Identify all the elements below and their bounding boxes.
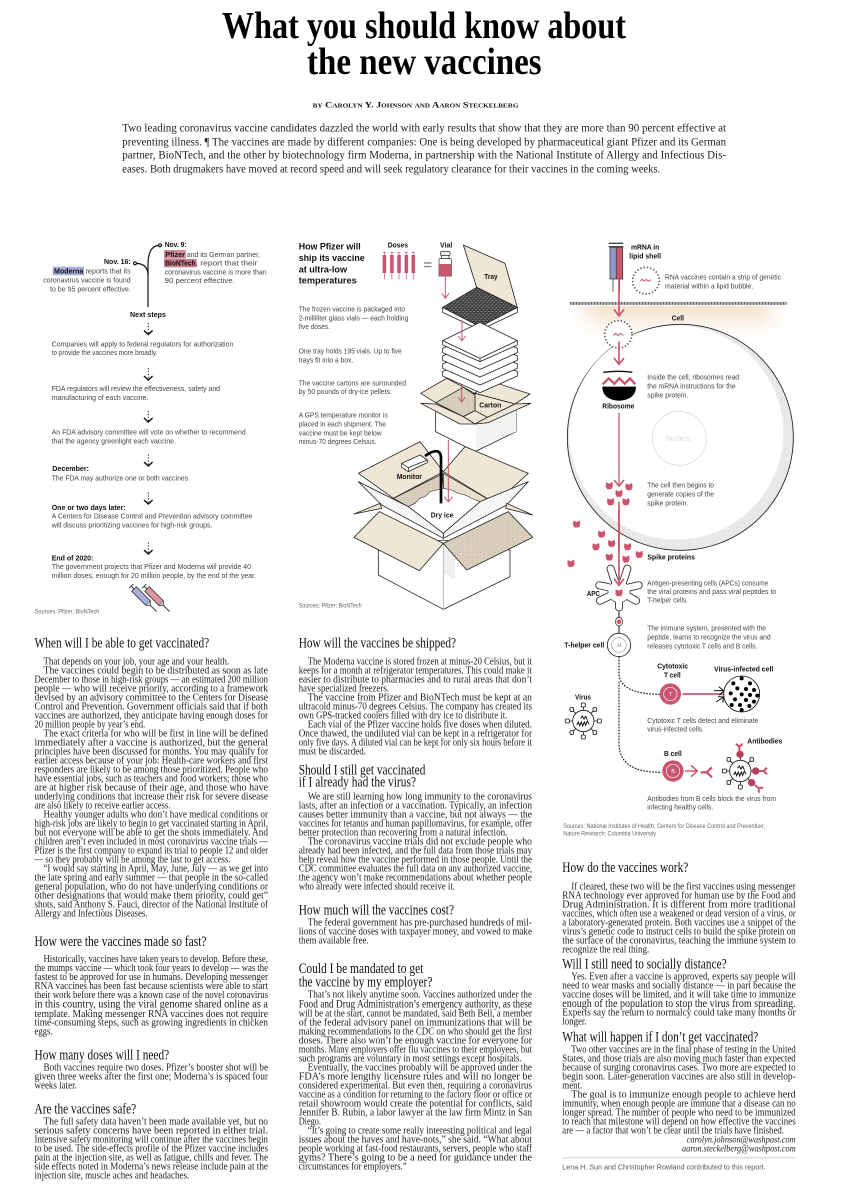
- virus-infected cell: [714, 676, 760, 712]
- tray and tray stack: [442, 245, 517, 393]
- text block: principles have been discussed for months. You may qualify for: [34, 747, 269, 758]
- text block: That’s not likely anytime soon. Vaccines authorized under the: [308, 990, 532, 1001]
- heading: [299, 762, 426, 791]
- heading: [299, 961, 432, 991]
- intro paragraph: Two leading coronavirus vaccine candidates dazzled the world with early results that show that they are more than 90 percent effective at: [122, 121, 727, 135]
- article column 3: [562, 860, 796, 1171]
- text block: are — a factor that won’t be clear until the trials have finished.: [562, 1126, 784, 1137]
- APC cell: [599, 510, 639, 607]
- step texts: The government projects that Pfizer and Moderna will provide 40: [52, 562, 251, 571]
- text block: That depends on your job, your age and your health.: [44, 657, 229, 668]
- text block: a laboratory-generated protein. Both vaccines use a snippet of the: [562, 918, 796, 929]
- text block: Diego.: [299, 1117, 321, 1128]
- text block: Yes. Even after a vaccine is approved, experts say people will: [571, 972, 796, 983]
- intro paragraph: [122, 121, 727, 176]
- art labels: Monitor: [397, 472, 422, 481]
- cell texts: Cell: [672, 314, 684, 323]
- text block: serious safety concerns have been reported in either trial.: [34, 1126, 268, 1137]
- shipping step texts: The vaccine cartons are surrounded: [299, 378, 406, 387]
- text block: The federal government has pre-purchased hundreds of mil-: [308, 918, 533, 929]
- text block: pain at the injection site, as well as fatigue, chills and fever. The: [34, 1153, 268, 1164]
- text block: The full safety data haven’t been made available yet, but no: [44, 1117, 268, 1128]
- immune texts: the viral proteins and pass viral peptides to: [647, 587, 776, 596]
- text block: Each vial of the Pfizer vaccine holds five doses when diluted.: [308, 720, 532, 731]
- contributor note: Lena H. Sun and Christopher Rowland contributed to this report.: [562, 1162, 766, 1171]
- text block: The Moderna vaccine is stored frozen at minus-20 Celsius, but it: [308, 657, 532, 668]
- text block: 20 million people by year’s end.: [34, 720, 145, 731]
- text block: Both vaccines require two doses. Pfizer’s booster shot will be: [44, 1063, 268, 1074]
- title: the new vaccines: [307, 41, 542, 83]
- text block: the late spring and early summer — that people in the so-called: [34, 873, 268, 884]
- immune texts: The immune system, presented with the: [647, 624, 766, 633]
- title: What you should know about: [222, 5, 626, 47]
- Nov. 9 note: 90 percent effective.: [165, 276, 235, 285]
- text block: recognize the real thing.: [562, 945, 649, 956]
- panel heading: at ultra-low: [299, 264, 348, 275]
- immune texts: T-helper cells.: [647, 595, 688, 604]
- immune texts: [564, 552, 782, 812]
- text block: people — who will receive priority, according to a framework: [34, 684, 269, 695]
- arrow: tray to stack: [458, 320, 466, 341]
- shipping step texts: 2-milliliter glass vials — each holding: [299, 313, 408, 322]
- text block: to be used. The side-effects profile of the Pfizer vaccine includes: [34, 1144, 268, 1155]
- text block: “It’s going to create some really interesting political and legal: [308, 1126, 532, 1137]
- text block: Control and Prevention. Government officials said that if both: [34, 702, 268, 713]
- step texts: December:: [52, 464, 89, 473]
- step texts: The FDA may authorize one or both vaccines.: [52, 473, 190, 482]
- text block: their work before there was a known case of the novel coronavirus: [34, 990, 268, 1001]
- immune texts: Spike proteins: [647, 552, 695, 561]
- immune texts: Antibodies from B cells block the virus from: [647, 794, 776, 803]
- text block: lasts, after an infection or a vaccination. Typically, an infection: [299, 801, 532, 812]
- text block: We are still learning how long immunity to the coronavirus: [308, 792, 532, 803]
- cytotoxic T cell: [660, 683, 681, 705]
- Nov. 16 note: Moderna: [54, 267, 84, 276]
- text block: them available free.: [299, 936, 369, 947]
- text block: December to those in high-risk groups — an estimated 200 million: [34, 675, 268, 686]
- text block: longer spread. The number of people who need to be immunized: [562, 1108, 796, 1119]
- sources: Sources: Pfizer; BioNTech: [35, 608, 100, 615]
- icon: five dose syringes: [383, 252, 415, 280]
- shipping step texts: One tray holds 195 vials. Up to five: [299, 347, 402, 356]
- heading: the vaccine by my employer?: [299, 975, 432, 991]
- cell texts: mRNA in: [631, 243, 660, 252]
- text block: immediately after a vaccine is authorized, but the general: [34, 738, 268, 749]
- text block: to reach that milestone will depend on how effective the vaccines: [562, 1117, 796, 1128]
- text block: The goal is to immunize enough people to achieve herd: [571, 1090, 796, 1101]
- text block: The vaccine from Pfizer and BioNTech must be kept at an: [308, 693, 532, 704]
- immune texts: Antibodies: [747, 736, 782, 745]
- arrow to spike proteins: [614, 413, 624, 550]
- Nov. 9 note: Pfizer: [165, 250, 185, 259]
- text block: Intensive safety monitoring will continue after the vaccines begin: [34, 1135, 268, 1146]
- cell texts: spike protein.: [647, 390, 688, 399]
- sources: Nature Research; Columbia University: [563, 830, 657, 837]
- step texts: will discuss prioritizing vaccines for high-risk groups.: [51, 521, 212, 530]
- text block: [34, 1063, 269, 1092]
- immune texts: Cytotoxic T cells detect and eliminate: [647, 716, 758, 725]
- text block: vaccines are authorized, they anticipate having enough doses for: [34, 711, 269, 722]
- immune texts: H: [617, 643, 621, 649]
- text block: people working at fast-food restaurants, servers, people who staff: [299, 1144, 533, 1155]
- text block: [34, 954, 269, 1038]
- icon: two syringes: [129, 584, 172, 614]
- heading: Could I be mandated to get: [299, 961, 423, 977]
- text block: causes better immunity than a vaccine, but not always — the: [299, 810, 532, 821]
- Nov. 16 note: [43, 257, 131, 293]
- text block: the agency won’t make recommendations about whether people: [299, 873, 532, 884]
- text block: already had been infected, and the full data from those trials may: [299, 846, 533, 857]
- text block: “I would say starting in April, May, June, July — as we get into: [44, 864, 268, 875]
- cell texts: RNA vaccines contain a strip of genetic: [665, 273, 781, 282]
- text block: Drug Administration. It is different from more traditional: [562, 900, 796, 911]
- carton box: [421, 378, 531, 452]
- text block: own GPS-tracked coolers filled with dry ice to distribute it.: [299, 711, 507, 722]
- Nov. 9 note: coronavirus vaccine is more than: [165, 267, 267, 276]
- text block: [562, 972, 796, 1028]
- step texts: million doses, enough for 20 million people, by the end of the year.: [52, 571, 256, 580]
- text block: considered experimental. But even then, requiring a coronavirus: [299, 1081, 532, 1092]
- text block: children aren’t even included in most coronavirus vaccine trials —: [34, 837, 269, 848]
- text block: lions of vaccine doses with taxpayer money, and vowed to make: [299, 927, 532, 938]
- panel heading: ship its vaccine: [299, 253, 365, 264]
- heading: How were the vaccines made so fast?: [34, 934, 206, 950]
- cell texts: material within a lipid bubble.: [665, 281, 753, 290]
- intro paragraph: partner, BioNTech, and the other by biotechnology firm Moderna, in partnership with the National Institute of Allergy and Infectious Dis-: [122, 148, 726, 162]
- text block: vaccine as a condition for returning to the factory floor or office or: [299, 1090, 533, 1101]
- tray base: [443, 287, 517, 330]
- text block: CDC committee evaluates the full data on any authorized vaccine,: [299, 864, 532, 875]
- shipping step texts: placed in each shipment. The: [299, 420, 386, 429]
- text block: injection site, muscle aches and headaches.: [34, 1171, 189, 1182]
- equals sign: [424, 263, 432, 267]
- text block: have specialized freezers.: [299, 684, 389, 695]
- step texts: One or two days later:: [52, 503, 126, 512]
- tray lid: [463, 245, 517, 307]
- arrow to ribosome: [614, 342, 624, 364]
- immune texts: infecting healthy cells.: [647, 803, 713, 812]
- sources: Sources: Pfizer; BioNTech: [299, 602, 362, 609]
- lipid bubble: [633, 267, 659, 294]
- Nov. 9 note: BioNTech: [165, 259, 196, 268]
- text block: The vaccines could begin to be distributed as soon as late: [44, 666, 268, 677]
- Nov. 16 note: Nov. 16:: [104, 257, 131, 266]
- text block: the surface of the coronavirus, teaching the immune system to: [562, 936, 796, 947]
- step texts: Companies will apply to federal regulators for authorization: [52, 339, 233, 348]
- intro paragraph: preventing illness. ¶ The vaccines are made by different companies: One is being developed by pharmaceutical giant Pfizer and its German: [122, 134, 726, 148]
- Nov. 9 note: [165, 240, 267, 285]
- article column 1: [34, 635, 269, 1182]
- text block: Eventually, the vaccines probably will be approved under the: [308, 1063, 532, 1074]
- text block: [34, 657, 269, 920]
- text block: begin soon. Later-generation vaccines are also still in develop-: [562, 1072, 796, 1083]
- text block: vaccines, which often use a weakened or dead version of a virus, or: [562, 909, 796, 920]
- step texts: [51, 339, 256, 580]
- doses and vial labels: Vial: [440, 241, 452, 250]
- text block: keeps for a month at refrigerator temperatures. This could make it: [299, 666, 532, 677]
- art labels: Dry ice: [431, 510, 453, 519]
- art labels: [397, 272, 502, 519]
- text block: only five days. A diluted vial can be kept for only six hours before it: [299, 738, 532, 749]
- panel: next steps timeline: [35, 240, 267, 615]
- text block: Two other vaccines are in the final phase of testing in the United: [571, 1045, 796, 1056]
- heading: How many doses will I need?: [34, 1047, 169, 1063]
- text block: [299, 990, 533, 1173]
- text block: fastest to be approved for use in humans. Developing messenger: [34, 972, 269, 983]
- sources: Sources: National Institutes of Health; Centers for Disease Control and Prevention;: [563, 823, 765, 830]
- shipping step texts: minus-70 degrees Celsius.: [299, 437, 377, 446]
- heading: What will happen if I don’t get vaccinated?: [562, 1029, 758, 1045]
- author emails: [682, 1136, 796, 1155]
- text block: weeks later.: [34, 1081, 77, 1092]
- text block: of the federal advisory panel on immunizations that will be: [299, 1018, 532, 1029]
- immune texts: APC: [587, 589, 601, 598]
- panel heading: [299, 242, 365, 287]
- text block: [562, 882, 796, 956]
- immune texts: peptide, learns to recognize the virus and: [647, 632, 771, 641]
- shipping step texts: five doses.: [299, 322, 330, 331]
- sources: [563, 823, 765, 837]
- immune texts: B: [671, 769, 675, 775]
- timeline branches: [134, 244, 162, 307]
- text block: Historically, vaccines have taken years to develop. Before these,: [44, 954, 268, 965]
- icon: vial: [439, 252, 452, 276]
- immune texts: Virus: [575, 693, 591, 702]
- Nov. 9 note: and its German partner,: [187, 250, 260, 259]
- cell texts: Ribosome: [602, 401, 634, 410]
- shipping step texts: A GPS temperature monitor is: [299, 411, 388, 420]
- doses and vial labels: Doses: [388, 241, 408, 250]
- text block: Experts say the return to normalcy could take many months or: [562, 1008, 796, 1019]
- author emails: aaron.steckelberg@washpost.com: [682, 1145, 796, 1155]
- immune texts: Virus-infected cell: [714, 664, 773, 673]
- heading: How do the vaccines work?: [562, 860, 688, 876]
- text block: Food and Drug Administration’s emergency authority, as these: [299, 999, 532, 1011]
- text block: months. Many employers offer flu vaccines to their employees, but: [299, 1045, 532, 1056]
- text block: high-risk jobs are likely to begin to get vaccinated starting in April,: [34, 819, 268, 830]
- text block: such programs are voluntary in most settings except hospitals.: [299, 1054, 522, 1065]
- text block: because of surging coronavirus cases. Two more are expected to: [562, 1063, 796, 1074]
- shipping step texts: trays fit into a box.: [299, 355, 353, 364]
- immune texts: T-helper cell: [564, 640, 604, 649]
- text block: will be at the start, cannot be mandated, said Beth Bell, a member: [299, 1009, 533, 1020]
- text block: have essential jobs, such as teachers and food workers; those who: [34, 774, 268, 785]
- cell texts: the mRNA instructions for the: [647, 381, 736, 390]
- step texts: An FDA advisory committee will vote on whether to recommend: [52, 427, 246, 436]
- cell texts: Inside the cell, ribosomes read: [647, 373, 739, 382]
- text block: must be discarded.: [299, 747, 366, 758]
- shipping step texts: by 50 pounds of dry-ice pellets.: [299, 387, 392, 396]
- text block: time-consuming steps, such as growing ingredients in chicken: [34, 1018, 268, 1029]
- cell texts: lipid shell: [629, 251, 661, 260]
- text block: doses. There also won’t be enough vaccine for everyone for: [299, 1036, 533, 1047]
- text block: FDA’s more lengthy licensure rules and will no longer be: [299, 1072, 532, 1083]
- text block: RNA vaccines has been fast because scientists were able to start: [34, 981, 268, 992]
- text block: other designations that would make them priority, could get”: [34, 891, 268, 902]
- extracellular band: [570, 303, 787, 338]
- shipping step texts: vaccine must be kept below: [299, 428, 382, 437]
- Nov. 16 note: to be 95 percent effective.: [50, 284, 131, 293]
- text block: Once thawed, the undiluted vial can be kept in a refrigerator for: [299, 729, 533, 740]
- virus: [565, 703, 601, 739]
- heading: How much will the vaccines cost?: [299, 902, 454, 918]
- Nov. 9 note: , report that their: [196, 259, 258, 268]
- cell art: [567, 243, 793, 567]
- step texts: End of 2020:: [52, 553, 93, 562]
- cell texts: Nucleus: [666, 434, 691, 443]
- text block: gyms? There’s going to be a need for guidance under the: [299, 1153, 532, 1164]
- text block: virus’s genetic code to instruct cells to build the spike protein on: [562, 927, 796, 938]
- heading: Should I still get vaccinated: [299, 762, 426, 778]
- shipping step texts: [299, 305, 408, 446]
- T-helper cell: [607, 633, 631, 657]
- text block: Allergy and Infectious Diseases.: [34, 909, 148, 920]
- panel heading: How Pfizer will: [299, 242, 361, 253]
- step texts: that the agency greenlight each vaccine.: [52, 436, 176, 445]
- spike proteins: [567, 482, 643, 567]
- immune texts: releases cytotoxic T cells and B cells.: [647, 641, 757, 650]
- heading: if I already had the virus?: [299, 775, 416, 791]
- byline: by Carolyn Y. Johnson and Aaron Steckelberg: [313, 100, 519, 110]
- text block: [34, 1117, 268, 1182]
- article column 2: [299, 635, 533, 1173]
- text block: template. Making messenger RNA vaccines does not require: [34, 1009, 268, 1020]
- text block: Pfizer is the first company to expand its trial to people 12 and older: [34, 846, 269, 857]
- text block: easier to distribute to pharmacies and to rural areas that don’t: [299, 675, 532, 686]
- step texts: A Centers for Disease Control and Prevention advisory committee: [52, 512, 252, 521]
- ribosome: [602, 371, 636, 401]
- dashed paths: [619, 657, 662, 772]
- text block: are also likely to receive earlier access.: [34, 801, 170, 812]
- step arrows: [144, 323, 153, 554]
- next steps heading: Next steps: [130, 310, 166, 319]
- panel: how mRNA vaccines work in the cell: [563, 243, 793, 837]
- immune texts: T cell: [664, 670, 681, 679]
- text block: eggs.: [34, 1027, 52, 1038]
- text block: States, and those trials are also moving much faster than expected: [562, 1054, 796, 1065]
- cell texts: generate copies of the: [647, 490, 714, 499]
- Nov. 9 note: Nov. 9:: [165, 240, 187, 249]
- stacked trays: [443, 322, 517, 393]
- bubble at membrane: [605, 321, 632, 348]
- intro paragraph: eases. Both drugmakers have moved at record speed and will seek regulatory clearance for their vaccines in the coming weeks.: [122, 162, 660, 176]
- cell body: [567, 324, 793, 550]
- immune texts: T: [669, 692, 673, 698]
- text block: making recommendations to the CDC on who should get the first: [299, 1027, 532, 1038]
- immune texts: Antigen-presenting cells (APCs) consume: [647, 578, 768, 587]
- panel: how Pfizer will ship its vaccine: [299, 241, 533, 609]
- main shipping box: [354, 440, 533, 609]
- art labels: Carton: [479, 400, 502, 409]
- cell texts: [602, 243, 781, 507]
- text block: better protection than recovering from a natural infection.: [299, 828, 507, 839]
- step texts: manufacturing of each vaccine.: [52, 393, 148, 402]
- text block: Jennifer B. Rubin, a labor lawyer at the law firm Mintz in San: [299, 1108, 532, 1119]
- B cell: [662, 760, 712, 782]
- text block: who already were infected should receive it.: [299, 882, 455, 893]
- heading: How will the vaccines be shipped?: [299, 635, 456, 651]
- cell texts: The cell then begins to: [647, 481, 714, 490]
- nucleus: [652, 411, 706, 465]
- text block: help reveal how the vaccine performed in those people. Until the: [299, 855, 532, 866]
- panel heading: temperatures: [299, 276, 357, 287]
- heading: When will I be able to get vaccinated?: [34, 635, 209, 651]
- text block: The coronavirus vaccine trials did not exclude people who: [308, 837, 532, 848]
- syringe: [609, 243, 623, 292]
- shipping step texts: The frozen vaccine is packaged into: [299, 305, 405, 314]
- text block: responders are likely to be among those prioritized. People who: [34, 765, 268, 776]
- text block: [299, 918, 533, 947]
- text block: earlier access because of your job: Health-care workers and first: [34, 756, 268, 767]
- attack arrows: [683, 688, 732, 700]
- virus with antibodies: [722, 744, 767, 793]
- text block: issues about the haves and have-nots,” she said. “What about: [299, 1135, 532, 1146]
- cell texts: spike protein.: [647, 498, 688, 507]
- text block: circumstances for employers.”: [299, 1162, 407, 1173]
- author emails: carolyn.johnson@washpost.com: [687, 1136, 796, 1146]
- text block: Healthy younger adults who don’t have medical conditions or: [44, 810, 269, 821]
- immune texts: B cell: [664, 749, 682, 758]
- company highlights: [53, 250, 197, 275]
- text block: given three weeks after the first one; Moderna’s is spaced four: [34, 1072, 269, 1083]
- immune texts: virus-infected cells.: [647, 724, 704, 733]
- art labels: Tray: [484, 272, 498, 281]
- doses and vial labels: [388, 241, 452, 250]
- Nov. 16 note: reports that its: [86, 267, 131, 276]
- text block: ultracold minus-70 degrees Celsius. The company has created its: [299, 702, 532, 713]
- Nov. 16 note: coronavirus vaccine is found: [43, 275, 131, 284]
- text block: longer.: [562, 1017, 587, 1028]
- text block: underlying conditions that increase their risk for severe disease: [34, 792, 268, 803]
- text block: RNA technology ever approved for human use by the Food and: [562, 891, 796, 902]
- text block: retail showroom would create the potential for conflicts, said: [299, 1099, 532, 1110]
- text block: devised by an advisory committee to the Centers for Disease: [34, 693, 268, 704]
- text block: [299, 657, 533, 758]
- text block: vaccines for tetanus and human papillomavirus, for example, offer: [299, 819, 533, 830]
- text block: but not everyone will be able to get the shots immediately. And: [34, 828, 268, 839]
- text block: the mumps vaccine — which took four years to develop — was the: [34, 963, 268, 974]
- text block: shots, said Anthony S. Fauci, director of the National Institute of: [34, 900, 269, 911]
- arrow: vial to tray: [442, 276, 449, 298]
- step texts: FDA regulators will review the effectiveness, safety and: [52, 384, 220, 393]
- text block: If cleared, these two will be the first vaccines using messenger: [571, 882, 796, 893]
- text block: ment.: [562, 1081, 582, 1092]
- step texts: to provide the vaccines more broadly.: [52, 348, 157, 357]
- immune texts: Cytotoxic: [657, 662, 688, 671]
- arrow into cell: [614, 280, 624, 316]
- title: [222, 5, 626, 83]
- text block: immunity, when enough people are immune that a disease can no: [562, 1099, 796, 1110]
- peptide connector: [616, 610, 622, 633]
- text block: The exact criteria for who will be first in line will be defined: [44, 729, 268, 740]
- text block: — so they probably will be among the last to get access.: [34, 855, 231, 866]
- text block: in this country, using the viral genome shared online as a: [34, 999, 268, 1011]
- text block: enough of the population to stop the virus from spreading.: [562, 998, 796, 1010]
- text block: side effects noted in Moderna’s news release include pain at the: [34, 1162, 268, 1173]
- text block: [299, 792, 533, 893]
- text block: need to wear masks and socially distance — in part because the: [562, 981, 796, 992]
- heading: Will I still need to socially distance?: [562, 957, 727, 973]
- immune response art: [565, 510, 767, 793]
- text block: [562, 1045, 796, 1137]
- monitor and cable: [402, 451, 441, 503]
- text block: are at higher risk because of their age, and those who have: [34, 783, 268, 794]
- heading: Are the vaccines safe?: [34, 1101, 136, 1117]
- text block: vaccine doses will be limited, and it will take time to immunize: [562, 990, 796, 1001]
- text block: general population, who do not have underlying conditions or: [34, 882, 269, 893]
